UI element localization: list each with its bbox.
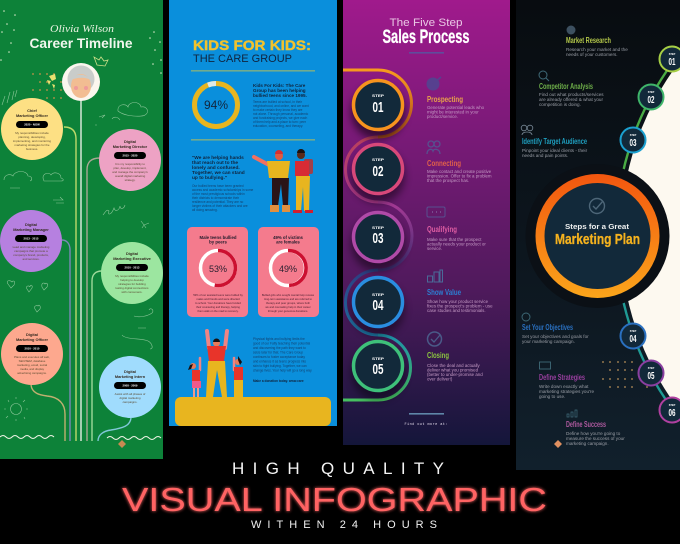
text: identify target audience xyxy=(521,125,588,158)
text: identify target audience: Pinpoint your ideal clients - their xyxy=(522,148,588,153)
card: digital marketing manager: Lead and manage marketing xyxy=(13,245,50,249)
card: female victims xyxy=(258,227,319,317)
text: define success: marketing campaign. xyxy=(566,441,609,446)
text: closing note: continues to foster acceptance today xyxy=(253,355,305,359)
step text: show value xyxy=(427,270,493,313)
text: market research: Research your market and the xyxy=(566,47,628,52)
text: closing note: change lives. Your help will go a long way. xyxy=(253,368,312,372)
step badge 04: STEP xyxy=(630,330,637,333)
step 04 xyxy=(351,278,405,336)
timeline curve xyxy=(616,53,680,236)
text: market research xyxy=(566,26,628,57)
step 03 xyxy=(351,212,405,271)
card: male teens: them walk on the road to recovery. xyxy=(197,309,239,313)
banner text xyxy=(122,459,547,531)
step text: qualifying xyxy=(427,207,486,251)
heading: The Five Step xyxy=(390,17,462,29)
card: digital marketing director xyxy=(99,129,161,191)
heading: Sales Process xyxy=(382,27,470,48)
text: intro: Kids For Kids: The Care xyxy=(253,83,306,88)
text: intro: neighborhood, and online, and we want xyxy=(253,104,309,108)
text: quote: resilience and potential. They are no xyxy=(192,200,244,204)
card: female victims: we and counseling help in their career xyxy=(265,305,311,309)
text: define strategies: Define Strategies xyxy=(539,373,585,382)
step text: connecting: Connecting xyxy=(427,159,461,168)
text: intro: not alone. Through personal, academic xyxy=(253,112,309,116)
card: digital marketing manager xyxy=(0,210,62,272)
text: set your objectives: Set your objectives and goals for xyxy=(522,334,589,339)
step text: connecting: impression. Offer to fix a problem xyxy=(427,174,492,178)
text: closing note: seize later for that. The Care Group xyxy=(253,350,303,354)
step badge 02 xyxy=(638,84,664,110)
panel: sales process xyxy=(343,0,510,445)
card: digital marketing intern: digital marketing xyxy=(119,396,141,400)
step 02 xyxy=(351,144,405,203)
panel: marketing plan xyxy=(516,0,680,470)
card: male teens: males and friends and were directed xyxy=(196,297,240,301)
text: closing note: Make a donation today. www.care xyxy=(253,379,304,383)
illustration: two teens xyxy=(254,149,313,213)
step text: prospecting: product/service. xyxy=(427,114,458,119)
ground xyxy=(175,397,331,426)
text: identify target audience: needs and pain points. xyxy=(522,153,568,158)
text: define strategies: going to use. xyxy=(539,394,565,399)
central circle: Marketing Plan xyxy=(555,231,640,248)
banner: high quality: HIGH QUALITY xyxy=(232,459,444,478)
card: digital marketing director: overall digital marketing xyxy=(115,174,146,178)
card: female victims: therapy and peer groups, where both xyxy=(266,301,311,305)
card: digital marketing manager: 2013 - 2015 xyxy=(24,236,39,240)
card: male teens: by peers xyxy=(209,240,227,244)
step badge 03: 03 xyxy=(630,138,637,149)
text: closing note: and enhance it as teens progress into xyxy=(253,360,306,364)
card: digital marketing officer: 2010 - 2010 xyxy=(25,346,40,350)
step badge 05 xyxy=(638,360,664,386)
text: define success xyxy=(566,410,625,446)
card: digital marketing executive: Digital xyxy=(126,251,138,256)
text: competitor analysis xyxy=(539,71,604,107)
step badge 03 xyxy=(620,128,646,152)
banner: within 24 hours: WITHEN 24 HOURS xyxy=(251,519,437,531)
step 03: STEP xyxy=(372,225,384,230)
card: digital marketing director: 2015 - 2020 xyxy=(123,154,138,158)
chart: 94% donut xyxy=(194,83,238,126)
waves xyxy=(0,436,161,440)
step badge 02: STEP xyxy=(648,91,655,94)
panel: career timeline xyxy=(0,0,163,459)
card: digital marketing intern: Marketing Intern xyxy=(115,374,146,379)
white curved area xyxy=(621,61,680,411)
card: chief marketing officer: Chief xyxy=(27,108,38,113)
text: closing note: good of our Fatty teaching their potential xyxy=(253,342,310,346)
text: quote xyxy=(192,155,254,212)
text: define success: measure the success of your xyxy=(566,436,625,441)
heading: KIDS FOR KIDS: xyxy=(193,37,311,53)
step text: qualifying: actually needs your product or xyxy=(427,242,486,246)
card: digital marketing director: plan, develop, implement, xyxy=(114,166,147,170)
card: digital marketing officer: Marketing Officer xyxy=(16,337,48,342)
dot pattern xyxy=(602,361,648,388)
icon: diamond xyxy=(118,440,126,448)
chart: 53% donut: 53% xyxy=(209,264,227,274)
text: competitor analysis: competition is doing. xyxy=(539,102,581,107)
card: digital marketing executive: with consumers. xyxy=(122,290,143,294)
text: intro xyxy=(253,83,309,128)
text: quote: their districts to demonstrate their xyxy=(192,196,240,200)
step badge 03: STEP xyxy=(630,134,637,137)
card: digital marketing officer: media, and display xyxy=(20,367,45,371)
card: digital marketing executive xyxy=(101,242,163,304)
card: digital marketing officer: marketing, email, social xyxy=(17,363,47,367)
step 05: 05 xyxy=(372,361,384,378)
banner: visual infographic: VISUAL INFOGRAPHIC xyxy=(122,481,547,518)
step 01: STEP xyxy=(372,93,384,98)
step text: show value: fixes the prospect's problem - use xyxy=(427,304,493,308)
step badge 04: 04 xyxy=(630,334,637,345)
step text: qualifying: service. xyxy=(427,246,442,251)
step text: closing: deliver what you promised xyxy=(427,368,479,372)
step badge 04 xyxy=(620,324,646,348)
card: male teens: to school. Your donations have funded xyxy=(195,301,241,305)
text: set your objectives: Set Your Objectives xyxy=(522,323,573,332)
text: quote: "We are helping hands xyxy=(192,155,244,161)
card: female victims: Bullied girls who sought mental help receive xyxy=(262,293,315,297)
card: digital marketing manager: company's brand, products, xyxy=(13,253,49,257)
text: market research: Market Research xyxy=(566,36,611,45)
step badge 06 xyxy=(660,398,680,422)
heading xyxy=(382,17,470,48)
card: digital marketing director: It is my responsibility to xyxy=(115,162,145,166)
step badge 06: STEP xyxy=(669,404,676,407)
text: quote: all doing amazing. xyxy=(192,208,218,212)
text: competitor analysis: Find out what products/services xyxy=(539,92,604,97)
card: chief marketing officer: implementing, and monitoring xyxy=(13,139,51,143)
icon: crown xyxy=(94,57,108,66)
card: chief marketing officer: Marketing Officer xyxy=(16,113,48,118)
step 04: STEP xyxy=(372,292,384,297)
card: female victims: through your generous donations. xyxy=(268,309,308,313)
text: identify target audience: Identify Target Audience xyxy=(522,137,587,146)
step text: show value: case studies and testimonials. xyxy=(427,308,486,313)
text: quote: Our bullied teens have been granted xyxy=(192,184,244,188)
text: define strategies xyxy=(539,362,594,399)
card: digital marketing manager: campaigns that promote a xyxy=(14,249,48,253)
card: digital marketing intern: Digital xyxy=(124,369,136,374)
card: female victims: long-term assistance and are referred to xyxy=(264,297,312,301)
step text: closing xyxy=(427,332,483,382)
step badge 02: 02 xyxy=(648,95,655,106)
text: intro: Group has been helping xyxy=(253,88,306,93)
text: set your objectives xyxy=(522,313,589,344)
card: digital marketing intern: Assist with all phases of xyxy=(115,392,146,396)
step 01 xyxy=(351,80,405,139)
icon: avatar portrait xyxy=(62,63,100,101)
card: chief marketing officer: 2020 - NOW xyxy=(24,122,40,126)
title xyxy=(30,24,133,51)
card: digital marketing director: strategy. xyxy=(125,178,136,182)
card: digital marketing executive: 2010 - 2013 xyxy=(125,266,140,270)
step 02: STEP xyxy=(372,157,384,162)
text: quote: access and academic scholarships in some xyxy=(192,188,254,192)
text: intro: and fundraising projects, we give each xyxy=(253,116,307,120)
card: digital marketing officer xyxy=(1,323,63,385)
card: digital marketing executive: lasting digital connections xyxy=(116,286,149,290)
card: female victims: are females xyxy=(276,240,300,244)
text: quote: lonely and confused. xyxy=(192,165,240,171)
timeline lines xyxy=(31,100,131,441)
text: closing note xyxy=(253,337,312,383)
step text: closing: Closing xyxy=(427,351,449,360)
step 05 xyxy=(351,342,405,400)
text: intro: education, counseling, and therapy. xyxy=(253,124,303,128)
text: quote: longer victims of their attackers and are xyxy=(192,204,248,208)
step text: closing: (better to under-promise and xyxy=(427,372,483,377)
card: chief marketing officer: My responsibilities include xyxy=(15,131,49,135)
footer text: Find out more at: xyxy=(404,422,448,427)
text: define success: Define how you're going to xyxy=(566,431,621,436)
chart: 49% donut: 49% xyxy=(279,264,297,274)
text: quote: of the most prestigious schools within xyxy=(192,192,245,196)
step text: closing: Close the deal and actually xyxy=(427,363,481,368)
card: digital marketing director: and manage the company's xyxy=(112,170,148,174)
step text: qualifying: Qualifying xyxy=(427,225,457,234)
text: intro: bullied teens since 1995. xyxy=(253,93,307,98)
card: chief marketing officer xyxy=(1,98,63,160)
step text: qualifying: Make sure that the prospect xyxy=(427,237,482,242)
step 05: STEP xyxy=(372,356,384,361)
text: closing note: Physical fights and bullying limits the xyxy=(253,337,305,341)
step badge 01: STEP xyxy=(669,53,676,56)
card: digital marketing intern: campaigns. xyxy=(123,400,138,404)
chart: 94% donut: 94% xyxy=(204,98,228,112)
card: digital marketing executive: strategies for building xyxy=(118,282,146,286)
text: quote: Together, we can stand xyxy=(192,170,245,176)
step 03: 03 xyxy=(372,230,384,247)
panel: kids for kids xyxy=(169,0,337,426)
illustration: adult and two children xyxy=(188,331,243,400)
card: digital marketing intern: 2008 - 2009 xyxy=(123,384,138,388)
card: digital marketing officer: SEO/SEM, database xyxy=(19,359,46,363)
text: set your objectives: your marketing campaign. xyxy=(522,339,575,344)
text: competitor analysis: are already offered & what your xyxy=(539,97,603,102)
step text: prospecting: Prospecting xyxy=(427,95,463,104)
text: define strategies: marketing strategies you're xyxy=(539,389,594,394)
title: Olivia Wilson xyxy=(50,24,114,35)
step text: prospecting xyxy=(426,77,485,119)
card: chief marketing officer: planning, developing, xyxy=(18,135,46,139)
step badge 01: 01 xyxy=(668,57,676,68)
step badge 05: STEP xyxy=(648,367,655,370)
text: define strategies: Write down exactly what xyxy=(539,384,589,389)
card: digital marketing manager: Marketing Manager xyxy=(13,227,49,232)
icon: diamond xyxy=(554,440,562,448)
text: quote: that reach out to the xyxy=(192,160,238,166)
step text: closing: over deliver!) xyxy=(427,376,453,382)
step 04: 04 xyxy=(372,297,384,314)
central circle xyxy=(526,164,670,308)
card: chief marketing officer: marketing strategies for the xyxy=(14,143,50,147)
step badge 05: 05 xyxy=(648,371,655,382)
card: male teens xyxy=(187,227,248,317)
card: male teens: Male teens bullied xyxy=(199,235,237,240)
step badge 06: 06 xyxy=(668,408,676,419)
card: digital marketing executive: helping to develop xyxy=(120,278,144,282)
step 02: 02 xyxy=(372,163,384,180)
card: digital marketing officer: Digital xyxy=(26,332,38,337)
card: male teens: their counseling and therapy, helping xyxy=(196,305,240,309)
card: digital marketing intern xyxy=(99,356,161,418)
step text: prospecting: Generate potential leads who xyxy=(427,105,485,110)
text: intro: Teens are bullied at school, in their xyxy=(253,100,303,104)
heading: THE CARE GROUP xyxy=(193,53,292,65)
step text: show value: Show how your product service xyxy=(427,299,489,304)
card: digital marketing manager: and services. xyxy=(22,257,40,261)
card: digital marketing officer: advertising campaigns. xyxy=(17,371,47,375)
step text: prospecting: might be interested in your xyxy=(427,110,479,114)
text: intro: of them help and a place to turn: peer xyxy=(253,120,307,124)
text: competitor analysis: Competitor Analysis xyxy=(539,82,593,91)
step text: connecting: that the prospect has. xyxy=(427,178,469,183)
card: male teens: 53% of our assisted teens were bullied by xyxy=(193,293,243,297)
step 01: 01 xyxy=(372,99,384,116)
text: intro: to make certain they know they are xyxy=(253,108,303,112)
step badge 01 xyxy=(660,46,680,72)
icon: target check xyxy=(590,198,604,214)
title: Career Timeline xyxy=(30,36,133,51)
card: chief marketing officer: business. xyxy=(26,147,38,151)
card: digital marketing director: Digital xyxy=(124,139,136,144)
text: closing note: skin to fight bullying. Together, we can xyxy=(253,364,307,368)
step text: connecting xyxy=(427,141,492,183)
card: digital marketing officer: Plans and executes all web, xyxy=(14,355,50,359)
text: define success: Define Success xyxy=(566,420,606,429)
card: digital marketing manager: Digital xyxy=(25,222,37,227)
card: female victims: 49% of victims xyxy=(273,235,304,240)
text: market research: needs of your customers. xyxy=(566,52,618,57)
heading xyxy=(193,37,311,65)
decorative stars and doodles xyxy=(2,90,153,421)
step text: connecting: Make contact and create positive xyxy=(427,169,492,174)
text: quote: up to bullying." xyxy=(192,175,227,181)
card: digital marketing executive: My responsibilities include xyxy=(115,274,149,278)
central circle: Steps for a Great xyxy=(565,224,630,231)
card: digital marketing director: Marketing Director xyxy=(113,144,148,149)
text: closing note: and discovering the path they want to xyxy=(253,346,306,350)
card: digital marketing executive: Marketing Executive xyxy=(113,256,152,261)
step text: show value: Show Value xyxy=(427,288,461,297)
winding path xyxy=(343,70,412,400)
